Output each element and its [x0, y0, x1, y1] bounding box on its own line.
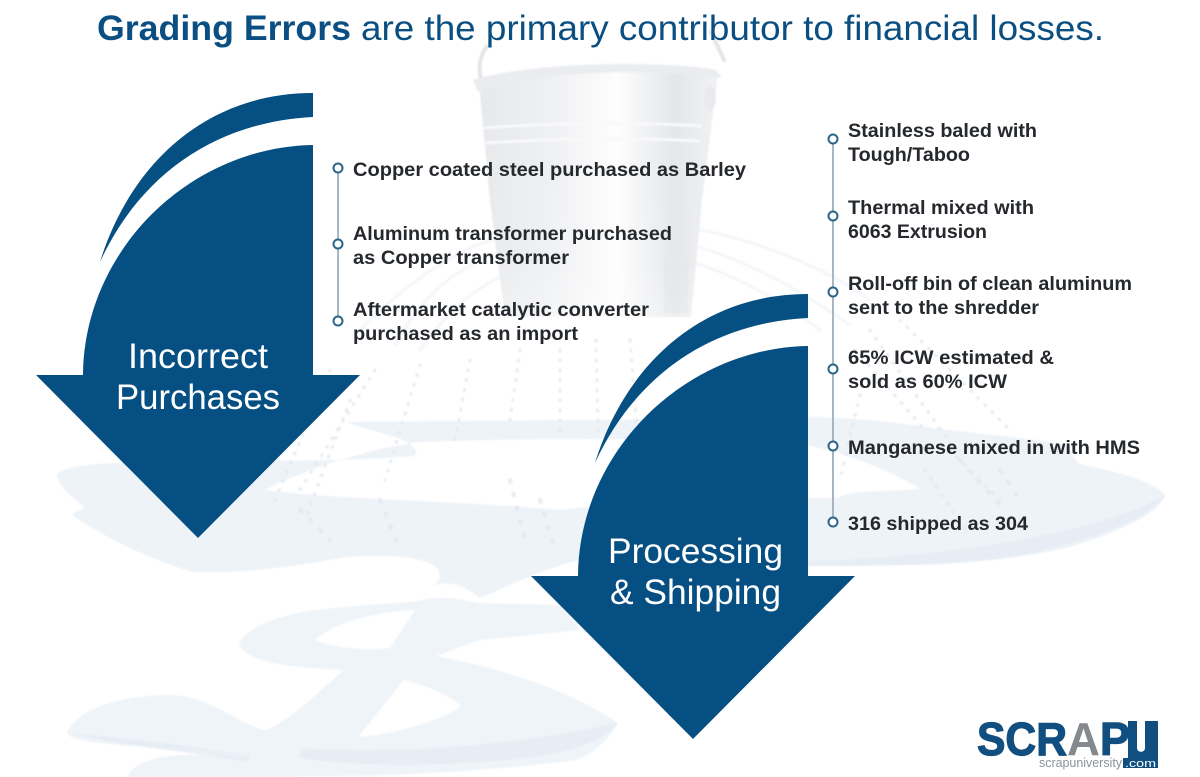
timeline: incorrect purchases: Aluminum transformer purchased [353, 223, 672, 245]
arrow: Processing & Shipping [531, 294, 855, 739]
timeline: processing and shipping: 316 shipped as 304 [848, 513, 1028, 535]
background: dollar-shaped puddle [57, 417, 1165, 777]
timeline: incorrect purchases: purchased as an import [353, 323, 579, 345]
timeline: processing and shipping: Roll-off bin of clean aluminum [848, 273, 1132, 295]
timeline: processing and shipping: Manganese mixed in with HMS [848, 437, 1140, 459]
arrow: Incorrect Purchases: Incorrect [128, 337, 268, 376]
background: bucket [473, 30, 725, 317]
arrow: Incorrect Purchases: Purchases [116, 378, 280, 417]
title: Grading Errors [97, 9, 351, 48]
timeline: processing and shipping: Thermal mixed with [848, 197, 1034, 219]
logo: ScrapU [977, 713, 1158, 770]
title: are the primary contributor to financial losses. [361, 9, 1104, 48]
timeline: processing and shipping: sold as 60% ICW [848, 371, 1008, 393]
arrow: Processing & Shipping: Processing [608, 532, 783, 571]
background: water streams and droplets [275, 228, 1020, 550]
arrow: Incorrect Purchases [36, 93, 360, 538]
timeline: incorrect purchases [334, 159, 746, 345]
logo: ScrapU: A [1067, 713, 1100, 765]
timeline: processing and shipping: 65% ICW estimated & [848, 347, 1054, 369]
timeline: processing and shipping [828, 120, 1140, 535]
timeline: incorrect purchases: Aftermarket catalytic converter [353, 299, 649, 321]
arrow: Processing & Shipping: & Shipping [610, 573, 781, 612]
timeline: processing and shipping: sent to the shredder [848, 297, 1039, 319]
timeline: processing and shipping: 6063 Extrusion [848, 221, 987, 243]
logo: ScrapU: scrapuniversity [1039, 755, 1122, 770]
logo: ScrapU: .com [1125, 758, 1156, 770]
timeline: processing and shipping: Tough/Taboo [848, 144, 970, 166]
timeline: incorrect purchases: as Copper transformer [353, 247, 569, 269]
logo: ScrapU: P [1100, 713, 1130, 765]
timeline: processing and shipping: Stainless baled with [848, 120, 1037, 142]
logo: ScrapU: SCR [977, 713, 1067, 765]
timeline: incorrect purchases: Copper coated steel purchased as Barley [353, 159, 746, 181]
